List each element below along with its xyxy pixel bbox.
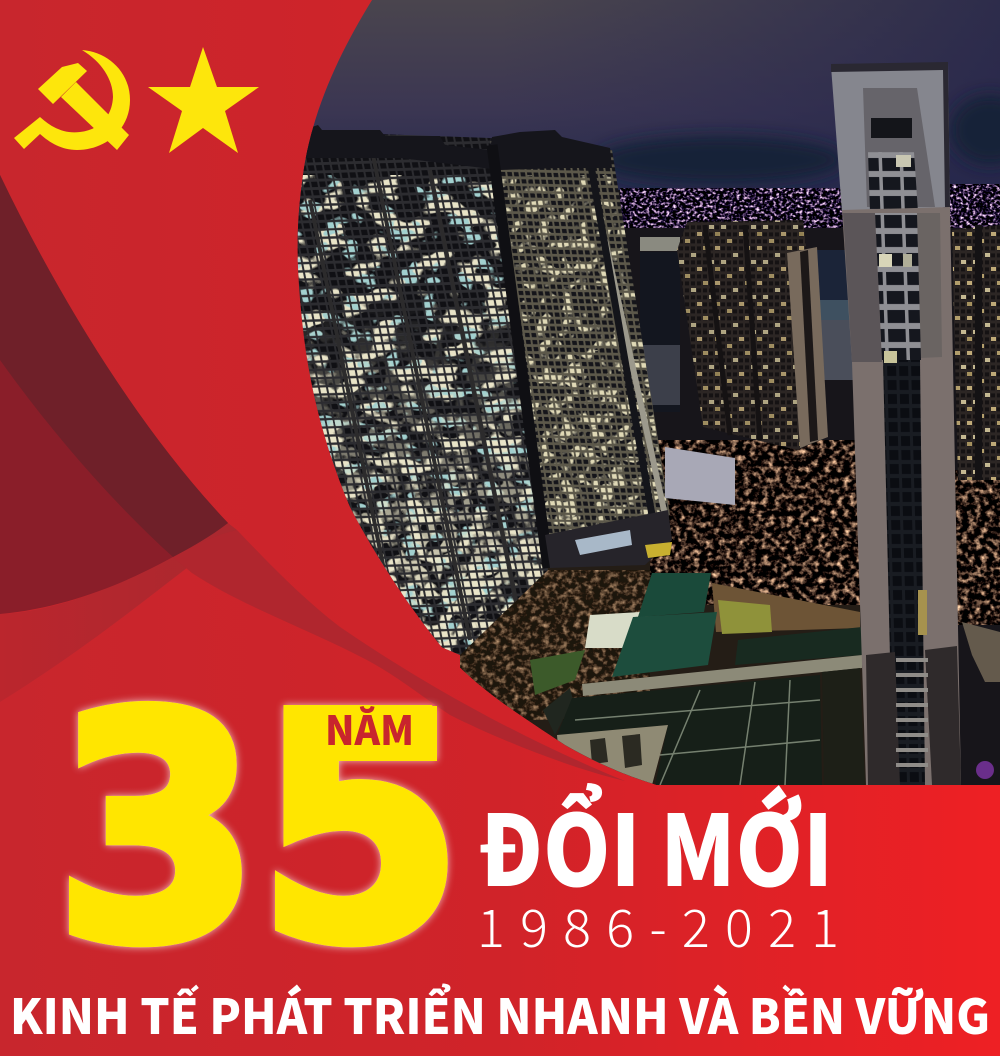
distant city lights xyxy=(620,184,1000,412)
city night photo xyxy=(280,0,1000,785)
yellow star icon xyxy=(148,47,259,153)
decorative curved band: sweeping translucent arc toward photo xyxy=(173,530,625,781)
tower seam shadow xyxy=(492,145,548,568)
green roofs xyxy=(543,573,865,785)
low white block xyxy=(665,447,735,505)
dark base under ground and river xyxy=(460,190,1000,785)
tall foreground tower xyxy=(831,62,961,785)
sky xyxy=(280,0,1000,240)
big yellow number 35 with NĂM badge: 5 xyxy=(258,651,462,1011)
bottom title: KINH TẾ PHÁT TRIỂN NHANH VÀ BỀN VỮNG xyxy=(10,978,990,1048)
far right tower xyxy=(952,225,1000,480)
neighbourhood and ground xyxy=(460,440,1000,785)
label: NĂM: NĂM xyxy=(325,699,414,757)
tower shaft xyxy=(842,207,961,785)
big yellow number 35 with NĂM badge: 3 xyxy=(55,651,259,1011)
heading: ĐỔI MỚI: ĐỔI MỚI xyxy=(478,773,833,915)
tower crown xyxy=(831,63,950,212)
decorative curved bands: dark upper arcs xyxy=(0,175,228,614)
years 1986-2021: 1986-2021 xyxy=(477,887,839,962)
podium shops xyxy=(545,510,672,568)
centre apartment tower xyxy=(490,138,670,534)
left apartment tower xyxy=(298,132,548,655)
big yellow number 35 with NĂM badge xyxy=(55,651,462,1011)
Communist Party hammer and sickle icon xyxy=(14,50,130,150)
decorative curved band: lower-left translucent arc xyxy=(0,523,237,702)
mid-distance apartment tower xyxy=(677,220,828,450)
tower rooftops xyxy=(296,125,612,170)
